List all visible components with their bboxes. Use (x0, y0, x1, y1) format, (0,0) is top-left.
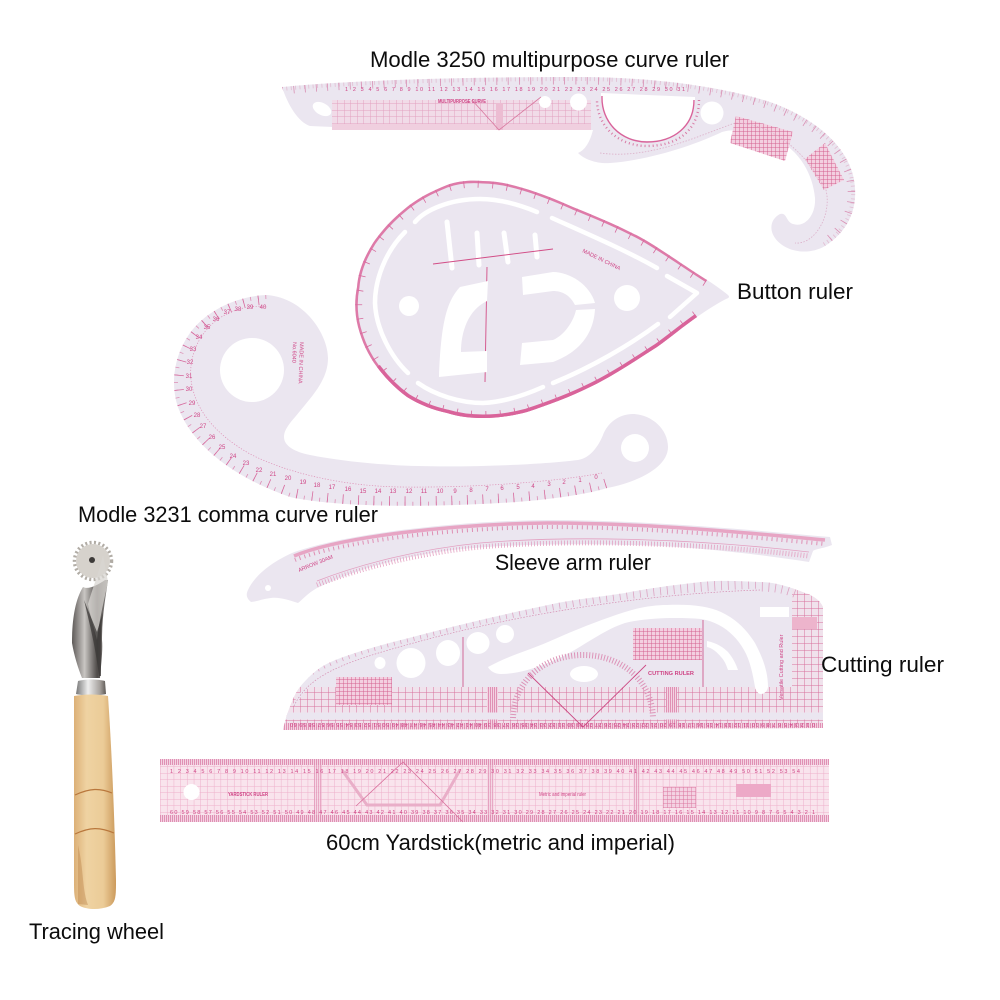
comma numbers: 25 (219, 445, 226, 451)
comma numbers: 27 (200, 424, 207, 430)
comma numbers: 7 (485, 487, 489, 493)
bottom scale numbers: 0 1 2 3 4 5 6 7 8 9 10 11 12 13 14 15 16 17 18 19 20 21 22 23 24 25 26 27 28 29 30 31 32 33 34 35 36 37 38 39 40 41 42 43 44 45 46 47 48 49 50 51 52 53 54 55 56 57 58 59 60 (290, 721, 815, 727)
comma numbers: 2 (562, 480, 566, 486)
comma numbers: 35 (204, 325, 211, 331)
comma stamp line two: MADE IN CHINA (297, 342, 304, 384)
comma numbers: 6 (500, 486, 504, 492)
toothed wheel (74, 542, 112, 580)
comma numbers: 15 (360, 489, 367, 495)
comma numbers: 20 (285, 476, 292, 482)
label: yardstick: 60cm Yardstick(metric and imperial) (326, 830, 675, 855)
yardstick tables: YARDSTICK RULER (228, 792, 268, 798)
comma numbers: 19 (300, 480, 307, 486)
comma numbers: 30 (186, 387, 193, 393)
grid panel (332, 97, 591, 130)
conversion tables (336, 628, 702, 705)
ferrule (76, 680, 106, 696)
inner dotted guide (191, 306, 602, 487)
upper scale numbers: 1 2 3 4 5 6 7 8 9 10 11 12 13 14 15 16 17 18 19 20 21 22 23 24 25 26 27 28 29 30 31 (345, 87, 685, 93)
reference lines (463, 620, 703, 687)
pink scale edge (355, 181, 707, 418)
yardstick tables: Metric and imperial ruler (539, 792, 586, 798)
comma numbers: 1 (578, 478, 582, 484)
cutting grid (280, 578, 825, 731)
comma numbers: 37 (224, 310, 231, 316)
crescent slot (707, 641, 738, 670)
comma numbers: 9 (453, 489, 457, 495)
sleeve hole (265, 585, 271, 591)
button cutouts (399, 272, 640, 377)
comma numbers: 5 (516, 485, 520, 491)
comma numbers: 33 (190, 347, 197, 353)
ruler: 60cm yardstick (160, 759, 829, 822)
ruler: Modle 3250 multipurpose curve ruler (282, 77, 855, 252)
comma stamp: No.6040 (290, 342, 297, 363)
comma ticks (174, 295, 607, 506)
size key: CUTTING RULER (648, 671, 694, 677)
comma numbers: 24 (230, 454, 237, 460)
title stamp: MULTIPURPOSE CURVE (438, 99, 486, 105)
curved slot (488, 605, 768, 694)
protractor (513, 655, 653, 727)
comma numbers: 18 (314, 483, 321, 489)
steel shank (72, 555, 108, 678)
scale tables (730, 116, 844, 190)
tool: tracing wheel (72, 542, 116, 909)
bottom scale numbers: 60 59 58 57 56 55 54 53 52 51 50 49 48 47 46 45 44 43 42 41 40 39 38 37 36 35 34 33 32 31 30 29 28 27 26 25 24 23 22 21 20 19 18 17 16 15 14 13 12 11 10 9 8 7 6 5 4 3 2 1 (170, 810, 815, 816)
comma numbers: 40 (260, 305, 267, 311)
comma numbers: 36 (213, 317, 220, 323)
pink guide lines (433, 249, 553, 382)
sleeve inner scale (317, 539, 809, 585)
holes (310, 93, 724, 141)
sleeve top scale band (294, 523, 825, 560)
comma numbers: 17 (329, 485, 336, 491)
label window (760, 607, 789, 617)
comma numbers: 31 (186, 374, 193, 380)
comma numbers: 3 (547, 482, 551, 488)
ruler: button ruler (355, 181, 729, 418)
ruler: sleeve arm ruler (247, 520, 832, 603)
label: button ruler: Button ruler (737, 279, 854, 304)
comma numbers: 23 (243, 461, 250, 467)
comma numbers: 4 (531, 484, 535, 490)
made in china stamp: MADE IN CHINA (581, 248, 621, 272)
comma numbers: 32 (187, 360, 194, 366)
comma numbers (186, 305, 598, 495)
wooden handle (74, 694, 116, 909)
yardstick hole (184, 784, 200, 800)
comma numbers: 28 (194, 413, 201, 419)
ruler: comma curve ruler (174, 295, 668, 506)
inner dotted guide (600, 123, 827, 243)
comma numbers: 8 (469, 488, 473, 494)
label: sleeve arm ruler: Sleeve arm ruler (495, 550, 651, 575)
comma numbers: 26 (209, 435, 216, 441)
label: tracing wheel: Tracing wheel (29, 919, 164, 944)
trapezoid guide (342, 762, 463, 822)
comma numbers: 13 (390, 489, 397, 495)
title: 3250 ruler label: Modle 3250 multipurpose curve ruler (370, 47, 729, 72)
comma numbers: 16 (345, 487, 352, 493)
fine tick bands (160, 759, 829, 822)
white slots (375, 199, 697, 403)
comma numbers: 29 (189, 401, 196, 407)
comma numbers: 11 (421, 489, 428, 495)
sleeve stamp: ARROW 30AM (298, 554, 334, 574)
yardstick tables (228, 784, 771, 808)
label: comma ruler: Modle 3231 comma curve ruler (78, 502, 378, 527)
comma numbers: 14 (375, 489, 382, 495)
comma numbers: 10 (437, 489, 444, 495)
comma numbers: 12 (406, 489, 413, 495)
top scale numbers: 1 2 3 4 5 6 7 8 9 10 11 12 13 14 15 16 17 18 19 20 21 22 23 24 25 26 27 28 29 30 31 32 33 34 35 36 37 38 39 40 41 42 43 44 45 46 47 48 49 50 51 52 53 54 (170, 769, 800, 775)
semicircle protractor scale (597, 96, 699, 146)
comma numbers: 38 (235, 307, 242, 313)
graded holes (374, 625, 598, 682)
comma numbers: 21 (270, 472, 277, 478)
vertical stamp: Versatile Cutting and Ruler (779, 634, 785, 700)
label: cutting ruler: Cutting ruler (821, 652, 944, 677)
comma numbers: 0 (594, 475, 598, 481)
comma holes (220, 338, 649, 462)
comma numbers: 22 (256, 468, 263, 474)
comma numbers: 39 (247, 305, 254, 311)
comma numbers: 34 (196, 335, 203, 341)
ruler: cutting ruler (280, 578, 825, 731)
